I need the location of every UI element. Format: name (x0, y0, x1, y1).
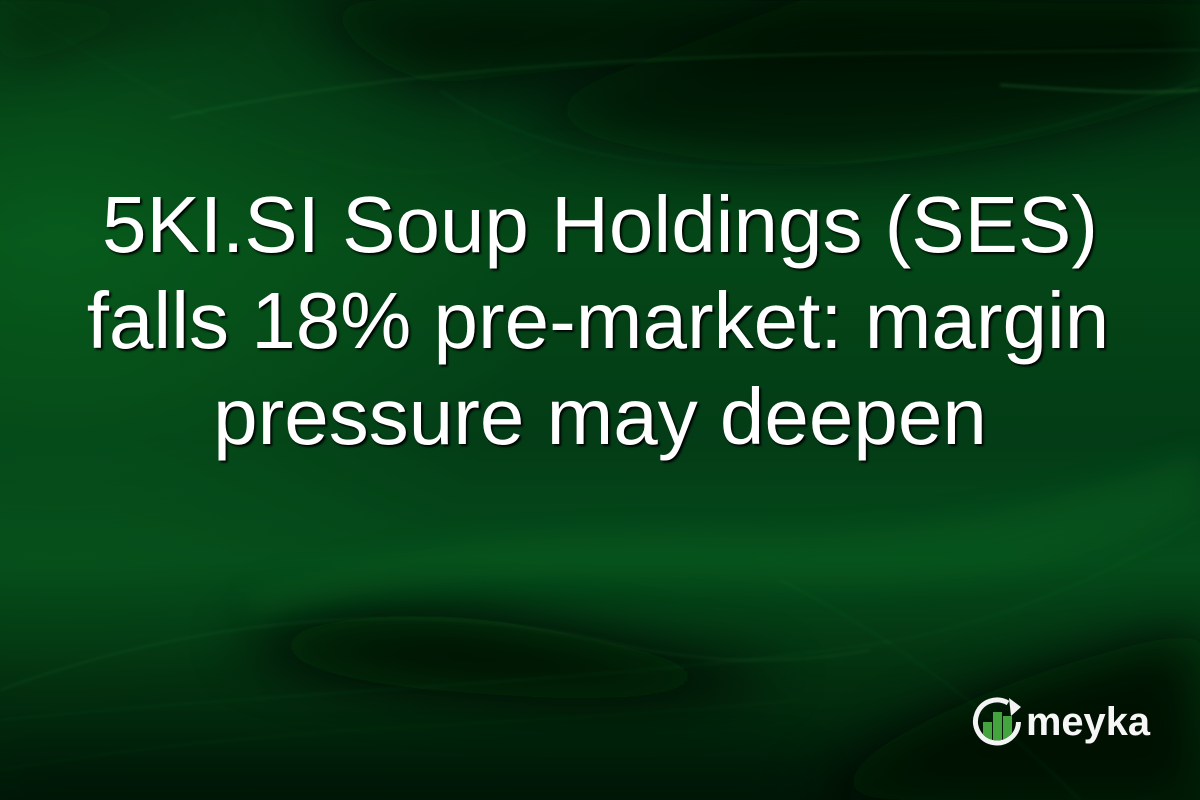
title (87, 180, 1109, 464)
title: pressure may deepen (213, 372, 987, 461)
logo: meyka (972, 697, 1151, 746)
icon: circular arrow with bars (976, 698, 1021, 743)
title: 5KI.SI Soup Holdings (SES) (102, 180, 1098, 269)
wordmark: meyka (1026, 700, 1151, 744)
title: falls 18% pre-market: margin (87, 276, 1109, 365)
